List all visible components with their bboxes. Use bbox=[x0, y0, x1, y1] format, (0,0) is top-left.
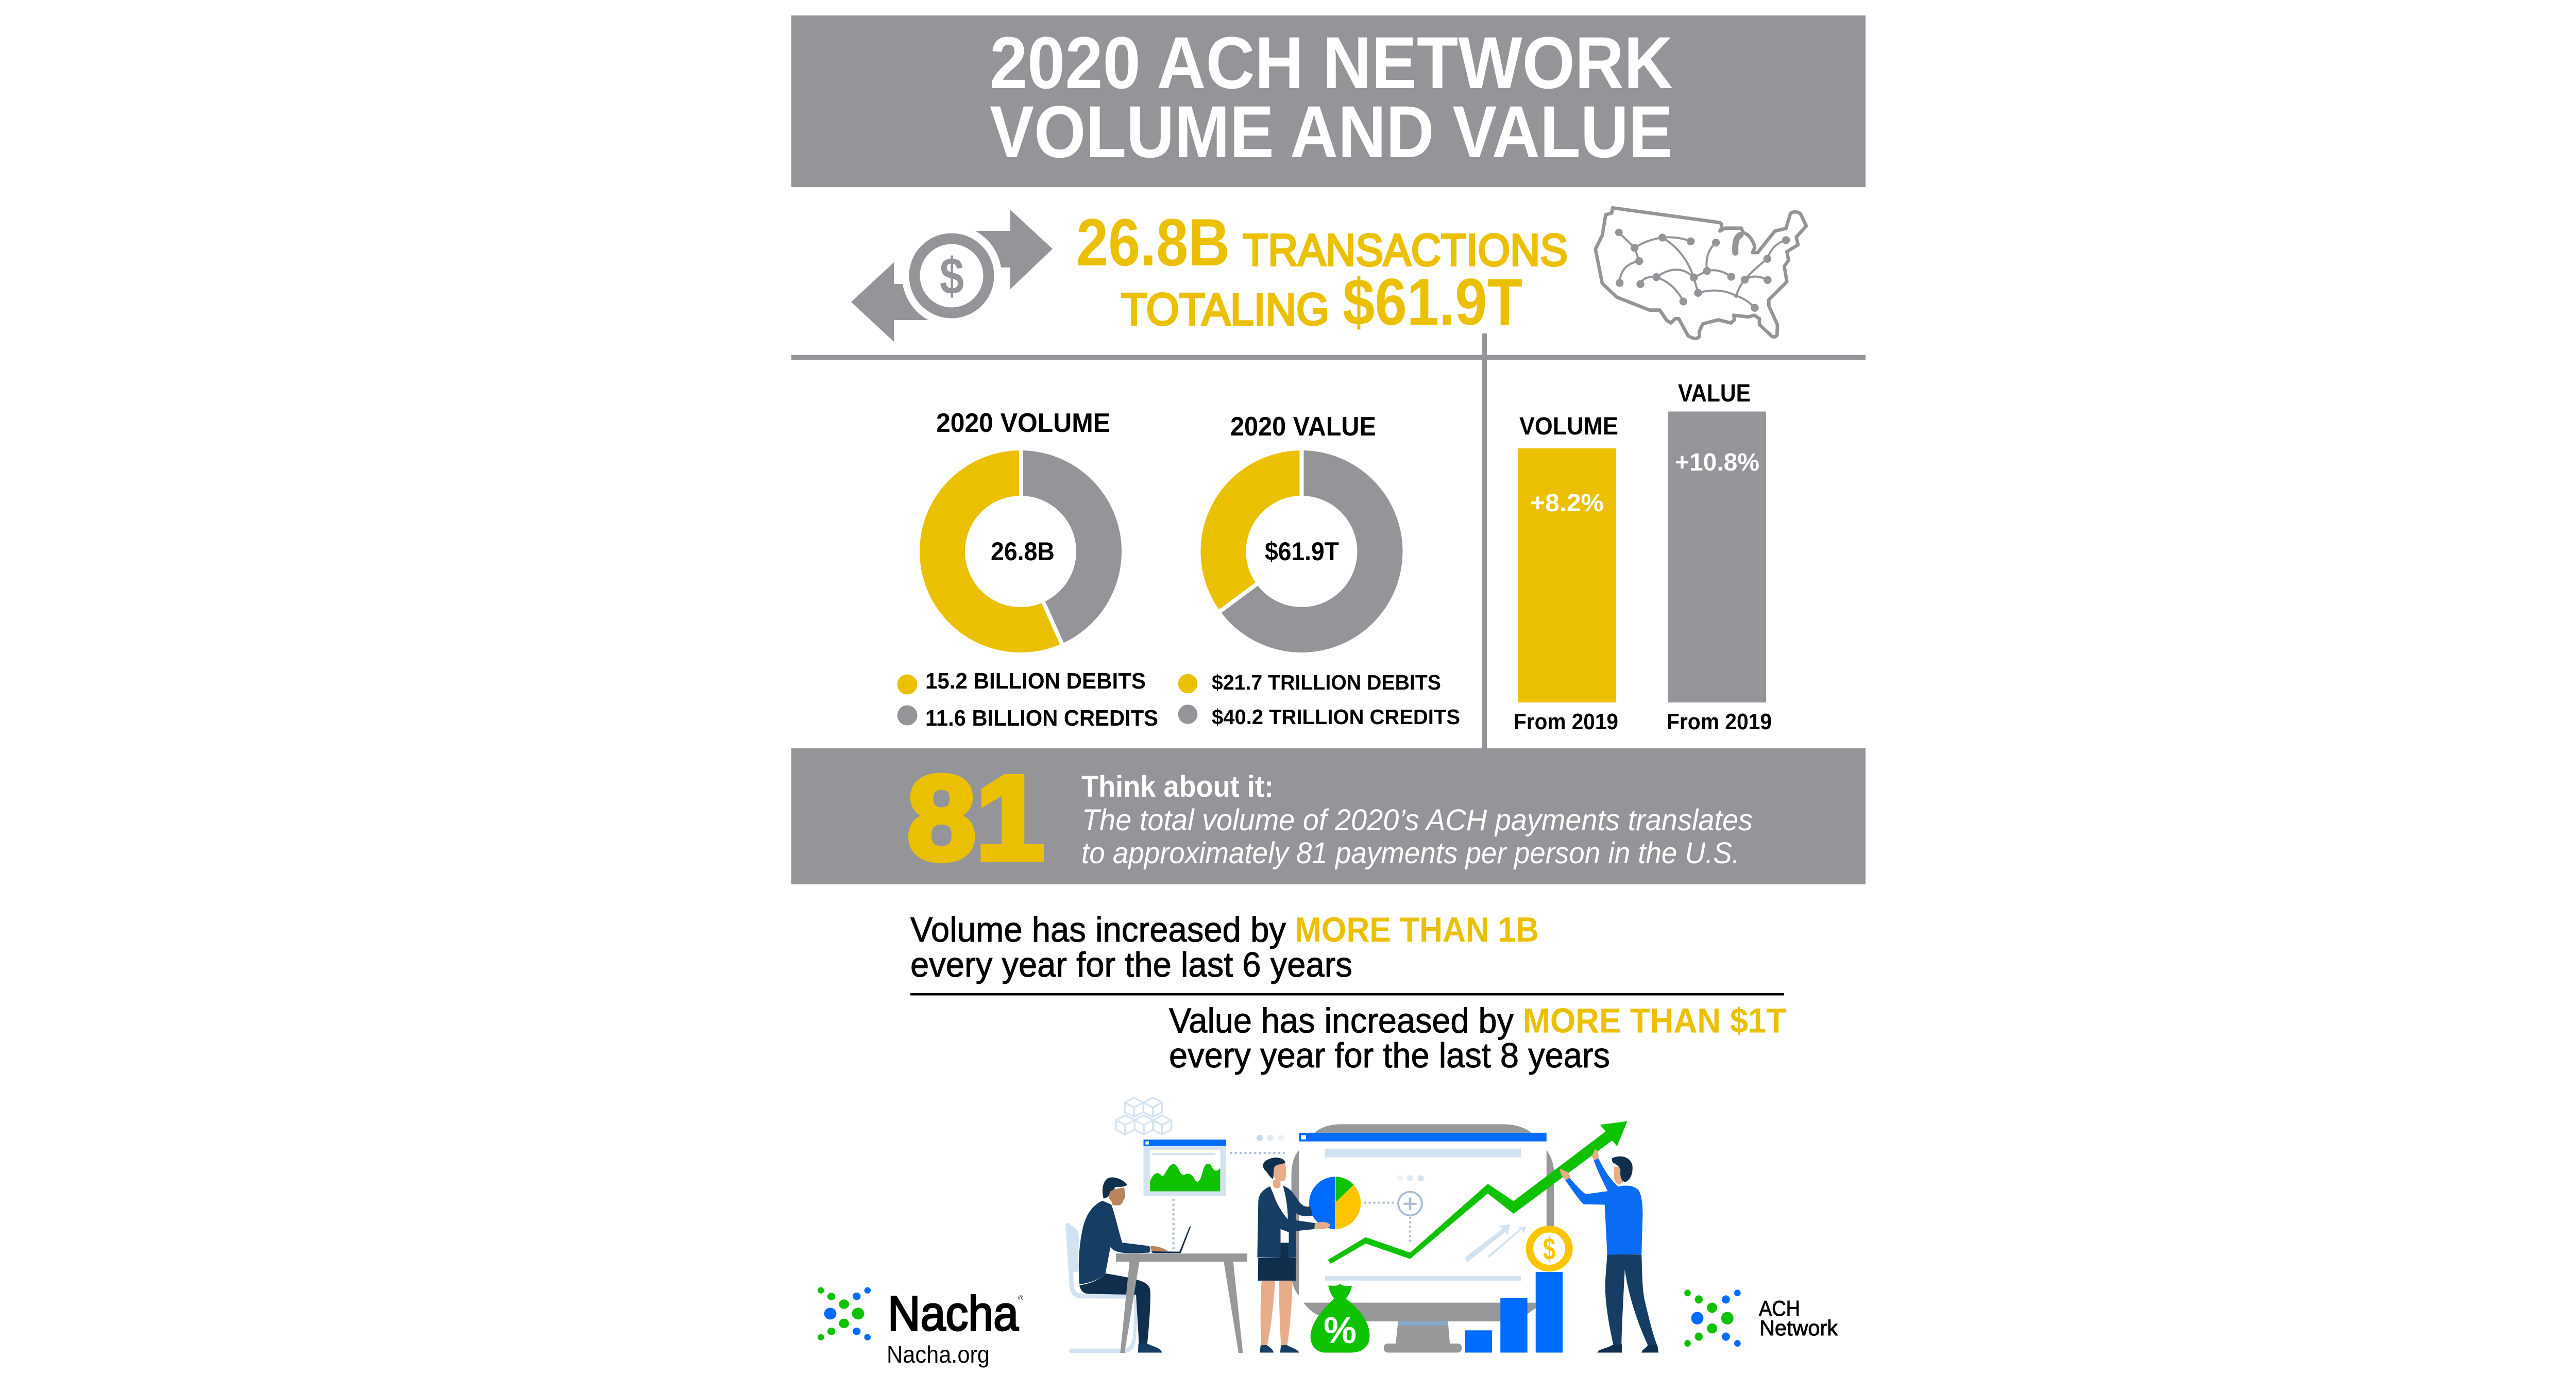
legend: value: $21.7 TRILLION DEBITS bbox=[1212, 671, 1441, 694]
desk bbox=[1116, 1253, 1247, 1353]
person: presenting woman bbox=[1257, 1158, 1330, 1352]
title banner: VOLUME AND VALUE bbox=[990, 91, 1673, 173]
panel: 2020 volume donut: 2020 VOLUME bbox=[936, 408, 1110, 438]
callout: think about it: Think about it: bbox=[1081, 770, 1274, 803]
text block: value increase: Value has increased by bbox=[1169, 1001, 1514, 1040]
panel: 2020 value donut bbox=[1200, 412, 1402, 652]
headline: transactions and total: $61.9T bbox=[1343, 265, 1522, 339]
bar: volume growth bbox=[1514, 413, 1618, 734]
icon: cube cluster bbox=[1116, 1098, 1171, 1134]
text block: volume increase: MORE THAN 1B bbox=[1295, 910, 1539, 949]
money bag bbox=[1311, 1284, 1369, 1352]
plus badge bbox=[1398, 1192, 1422, 1215]
pie chart bbox=[1309, 1177, 1361, 1229]
headline: transactions and total: 26.8B bbox=[1076, 205, 1230, 280]
title banner bbox=[791, 15, 1866, 187]
icon: dollar coin with exchange arrows: $ bbox=[940, 247, 964, 305]
logo: ACH Network: Network bbox=[1759, 1316, 1838, 1340]
headline: transactions and total bbox=[1076, 205, 1568, 339]
text block: value increase: MORE THAN $1T bbox=[1523, 1001, 1786, 1040]
panel: 2020 volume donut bbox=[920, 408, 1122, 652]
legend: volume bbox=[897, 668, 1158, 731]
logo: Nacha: ® bbox=[1018, 1294, 1024, 1302]
chart window bbox=[1144, 1139, 1226, 1196]
legend: volume: 11.6 BILLION CREDITS bbox=[925, 706, 1158, 731]
bar: volume growth: VOLUME bbox=[1519, 413, 1618, 440]
headline: transactions and total: TRANSACTIONS bbox=[1243, 225, 1568, 275]
title banner: 2020 ACH NETWORK bbox=[990, 22, 1673, 104]
coin dollar sign: $ bbox=[1543, 1232, 1555, 1266]
logo: ACH Network: ACH bbox=[1759, 1296, 1800, 1320]
callout: think about it bbox=[791, 748, 1866, 885]
status dots bbox=[1257, 1135, 1424, 1181]
text block: volume increase: every year for the last 6 years bbox=[910, 945, 1352, 984]
bag percent sign: % bbox=[1324, 1310, 1357, 1351]
callout: think about it: to approximately 81 payments per person in the U.S. bbox=[1081, 836, 1740, 870]
icon: US network map bbox=[1596, 208, 1806, 339]
callout: think about it: 81 bbox=[907, 751, 1044, 885]
section dividers bbox=[791, 333, 1866, 749]
icon: dollar coin with exchange arrows bbox=[851, 210, 1053, 342]
headline: transactions and total: TOTALING bbox=[1121, 284, 1329, 334]
text block: volume increase: Volume has increased by bbox=[910, 910, 1286, 949]
text block: value increase: every year for the last 8 years bbox=[1169, 1036, 1610, 1075]
monitor bbox=[1292, 1124, 1554, 1352]
panel: 2020 value donut: 2020 VALUE bbox=[1230, 412, 1376, 442]
text block: value increase bbox=[1169, 1001, 1786, 1075]
small growth arrows bbox=[1464, 1224, 1527, 1262]
logo: ACH Network bbox=[1684, 1289, 1838, 1347]
logo: Nacha: Nacha bbox=[888, 1286, 1019, 1341]
bar: volume growth: +8.2% bbox=[1530, 490, 1604, 517]
bar: value growth bbox=[1667, 380, 1772, 734]
logo: Nacha bbox=[818, 1286, 1024, 1368]
panel: 2020 value donut: $61.9T bbox=[1265, 537, 1339, 566]
bar columns bbox=[1465, 1272, 1563, 1352]
person: man lifting arrow bbox=[1560, 1149, 1658, 1352]
logo: Nacha: Nacha.org bbox=[887, 1341, 990, 1368]
bar: value growth: +10.8% bbox=[1675, 449, 1759, 476]
legend: value: $40.2 TRILLION CREDITS bbox=[1212, 705, 1460, 729]
legend: value bbox=[1178, 671, 1460, 729]
person: seated man with laptop bbox=[1065, 1177, 1191, 1353]
connector dots bbox=[1174, 1153, 1410, 1249]
bar: volume growth: From 2019 bbox=[1514, 709, 1618, 734]
panel: 2020 volume donut: 26.8B bbox=[991, 537, 1055, 566]
callout: think about it: The total volume of 2020’s ACH payments translates bbox=[1082, 803, 1753, 837]
gold coin ring bbox=[1530, 1229, 1569, 1268]
text block: volume increase bbox=[910, 910, 1539, 984]
rising green arrow bbox=[1328, 1121, 1628, 1264]
legend: volume: 15.2 BILLION DEBITS bbox=[925, 668, 1146, 694]
bar: value growth: From 2019 bbox=[1667, 709, 1772, 734]
illustration: business team and growth chart bbox=[1065, 1098, 1658, 1353]
bar: value growth: VALUE bbox=[1678, 380, 1751, 407]
